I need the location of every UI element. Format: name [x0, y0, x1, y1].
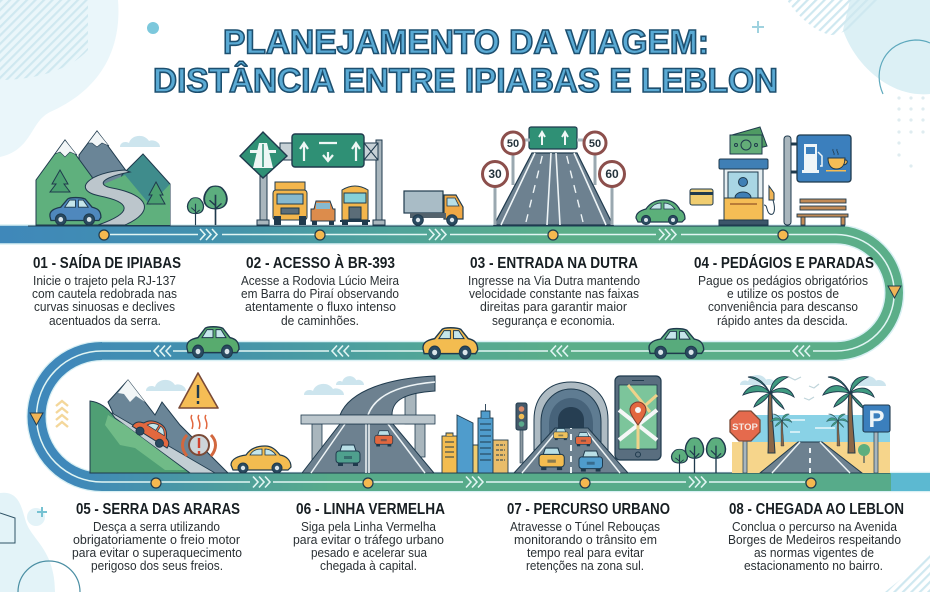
step 03 text: Ingresse na Via Dutra mantendo [468, 274, 640, 288]
icon: red car front [375, 431, 393, 446]
icon: parking sign [863, 405, 890, 473]
step 03 text [468, 255, 640, 328]
icon: banknotes [730, 127, 767, 154]
yellow sedan [231, 446, 291, 473]
step 02 text: atentamente o fluxo intenso [245, 300, 396, 314]
route nodes [99, 230, 816, 488]
icon: red car on slope [130, 412, 176, 451]
illustration 06: Linha Vermelha overpass [301, 376, 435, 473]
step 08 text: as normas vigentes de [754, 546, 874, 560]
step 07 text: monitorando o trânsito em [514, 533, 657, 547]
bench [797, 199, 848, 225]
step 02 text [241, 255, 399, 328]
trees [188, 186, 227, 225]
illustration 08: Leblon beach [730, 375, 890, 473]
step 04 text: rápido antes da descida. [717, 314, 848, 328]
step 03 text: segurança e economia. [492, 314, 615, 328]
step 05 text: Desça a serra utilizando [93, 520, 220, 534]
step 02 text: de caminhões. [281, 314, 359, 328]
illustration 07: city buildings [442, 404, 508, 473]
step 06 text: chegada à capital. [320, 559, 417, 573]
icon: stop sign [730, 411, 760, 473]
step 06 text: para evitar o tráfego urbano [293, 533, 444, 547]
green car [636, 200, 685, 225]
icon: teal car front [336, 445, 360, 466]
illustration 04: toll booth and rest stop [690, 127, 851, 225]
step 06 text: pesado e acelerar sua [311, 546, 427, 560]
step 01 text: com cautela redobrada nas [32, 287, 177, 301]
step 06 text [293, 501, 445, 573]
step 08 text: Conclua o percurso na Avenida [732, 520, 897, 534]
winding road timeline [0, 226, 930, 491]
icon: warning triangle [179, 373, 218, 408]
title: PLANEJAMENTO DA VIAGEM: [223, 24, 709, 62]
step 01 text: 01 - SAÍDA DE IPIABAS [33, 255, 181, 272]
title: DISTÂNCIA ENTRE IPIABAS E LEBLON [153, 62, 778, 100]
cars on the middle road [187, 327, 704, 359]
background decoration: top-right blob [752, 0, 930, 168]
step 04 text: Pague os pedágios obrigatórios [698, 274, 868, 288]
step 02 text: em Barra do Piraí observando [241, 287, 399, 301]
step 02 text: Acesse a Rodovia Lúcio Meira [241, 274, 399, 288]
illustration 02: highway gantry with trucks [240, 132, 385, 225]
step 05 text [72, 501, 242, 573]
step 07 text: Atravesse o Túnel Rebouças [510, 520, 660, 534]
step 05 text: perigoso dos seus freios. [91, 559, 223, 573]
fuel and café sign [784, 135, 851, 225]
step 04 text [694, 255, 874, 328]
illustration 07: Túnel Rebouças [514, 382, 628, 473]
illustration 03: Via Dutra with speed signs: 50 [507, 138, 519, 150]
step 07 text: tempo real para evitar [527, 546, 644, 560]
background decoration: bottom-left blob [0, 493, 80, 592]
step 08 text: 08 - CHEGADA AO LEBLON [729, 501, 904, 518]
step 04 text: conveniência para descanso [708, 300, 858, 314]
step 07 text: retenções na zona sul. [526, 559, 644, 573]
step 01 text: acentuados da serra. [49, 314, 161, 328]
illustration 03: Via Dutra with speed signs: 50 [589, 138, 601, 150]
step 08 text: estacionamento no bairro. [744, 559, 883, 573]
step 07 text [507, 501, 670, 573]
icon: credit card [690, 189, 713, 205]
step 07 text: 07 - PERCURSO URBANO [507, 501, 670, 518]
illustration 01: mountains and winding road [36, 131, 170, 225]
yellow chevrons [56, 401, 68, 427]
direction triangles [30, 286, 901, 425]
step 03 text: velocidade constante nas faixas [469, 287, 639, 301]
step 02 text: 02 - ACESSO À BR-393 [246, 255, 395, 272]
illustration 05: Serra das Araras [90, 373, 228, 473]
background decoration: top-left blob [0, 0, 159, 157]
step 03 text: direitas para garantir maior [480, 300, 627, 314]
step 05 text: obrigatoriamente o freio motor [73, 533, 240, 547]
trees [672, 438, 725, 473]
step 01 text [32, 255, 181, 328]
step 01 text: Inicie o trajeto pela RJ-137 [33, 274, 176, 288]
icon: stop sign: STOP [732, 422, 759, 433]
step 06 text: Siga pela Linha Vermelha [301, 520, 436, 534]
delivery truck [404, 191, 463, 225]
step 06 text: 06 - LINHA VERMELHA [296, 501, 445, 518]
step 05 text: para evitar o superaquecimento [72, 546, 242, 560]
icon: overheated brake [182, 415, 216, 456]
step 05 text: 05 - SERRA DAS ARARAS [76, 501, 240, 518]
toll booth [719, 159, 774, 225]
icon: phone with map [615, 376, 661, 460]
background decoration: bottom-right hatch [885, 555, 930, 592]
step 08 text: Borges de Medeiros respeitando [728, 533, 901, 547]
illustration 03: Via Dutra with speed signs [482, 127, 624, 225]
step 08 text [728, 501, 904, 573]
step 03 text: 03 - ENTRADA NA DUTRA [470, 255, 638, 272]
illustration 03: Via Dutra with speed signs: 60 [605, 167, 619, 181]
step 04 text: 04 - PEDÁGIOS E PARADAS [694, 255, 874, 272]
icon: parking sign: P [868, 406, 885, 433]
icon: traffic light [516, 403, 527, 463]
step 04 text: e utilize os postos de [727, 287, 839, 301]
title [153, 24, 778, 100]
illustration 03: Via Dutra with speed signs: 30 [488, 167, 502, 181]
step 01 text: curvas sinuosas e declives [34, 300, 175, 314]
